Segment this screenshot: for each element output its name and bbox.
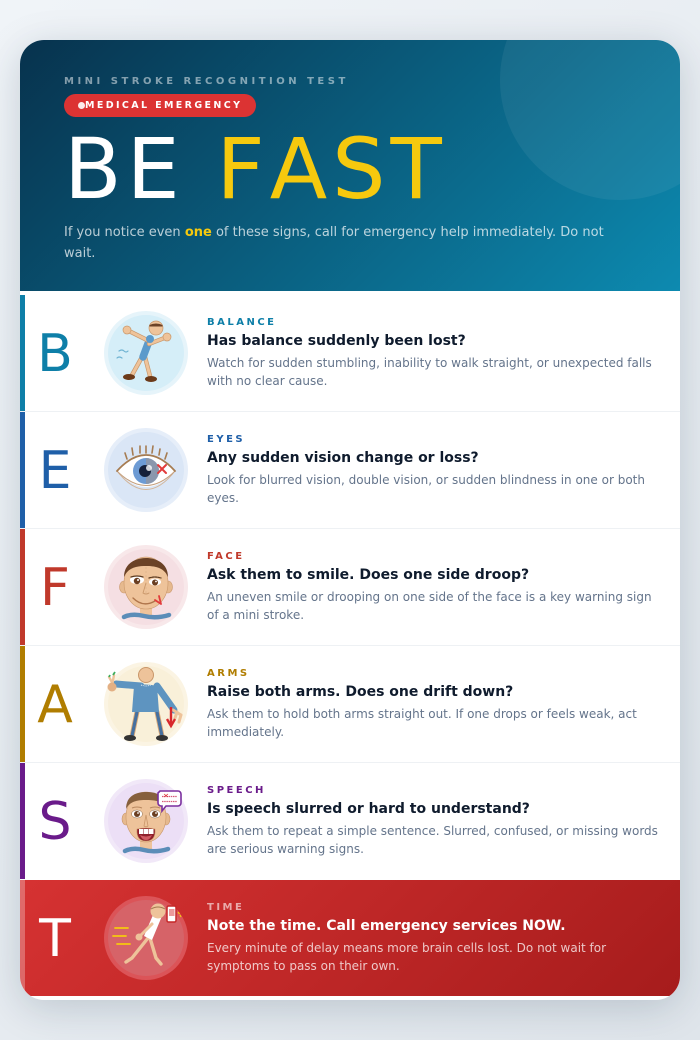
badge: medical emergency [64,94,256,117]
label: SPEECH [207,785,266,796]
description: An uneven smile or drooping on one side of the face is a key warning sign of a mini stroke. [207,590,652,622]
description: Ask them to repeat a simple sentence. Slurred, confused, or missing words are serious warning signs. [207,824,658,856]
label: FACE [207,551,245,562]
icon: eye with blurred vision [104,428,188,512]
panel: F face [20,529,680,646]
icon: person losing balance [104,311,188,395]
letter E: E [39,441,71,501]
question: Is speech slurred or hard to understand? [207,801,530,817]
description: Every minute of delay means more brain cells lost. Do not wait for symptoms to pass on their own. [207,941,606,973]
label: TIME [207,902,244,913]
question: Note the time. Call emergency services NOW. [207,918,566,934]
label: ARMS [207,668,250,679]
panel: S speech [20,763,680,880]
panel: A arms [20,646,680,763]
panel: T time [20,880,680,996]
panel: B balance [20,295,680,412]
label: EYES [207,434,245,445]
icon: person running with phone [104,896,188,980]
panel: header [20,40,680,291]
kicker text: MINI STROKE RECOGNITION TEST [64,76,349,87]
icon: arm drifting down [104,662,188,746]
letter S: S [38,792,72,852]
letter T: T [39,909,71,969]
letter A: A [37,675,73,735]
description: Look for blurred vision, double vision, or sudden blindness in one or both eyes. [207,473,645,505]
icon: slurred speech [104,779,188,863]
description: Watch for sudden stumbling, inability to walk straight, or unexpected falls with no clear cause. [207,356,652,388]
question: Has balance suddenly been lost? [207,333,466,349]
question: Ask them to smile. Does one side droop? [207,567,529,583]
letter B: B [37,324,73,384]
subtitle: If you notice even one of these signs, call for emergency help immediately. Do not wait. [64,225,604,261]
label: BALANCE [207,317,277,328]
title: BE FAST [64,120,447,218]
panel: E eyes [20,412,680,529]
letter F: F [40,558,70,618]
icon: drooping face [104,545,188,629]
description: Ask them to hold both arms straight out. If one drops or feels weak, act immediately. [207,707,637,739]
badge: medical emergency: MEDICAL EMERGENCY [85,100,242,111]
question: Raise both arms. Does one drift down? [207,684,513,700]
question: Any sudden vision change or loss? [207,450,479,466]
